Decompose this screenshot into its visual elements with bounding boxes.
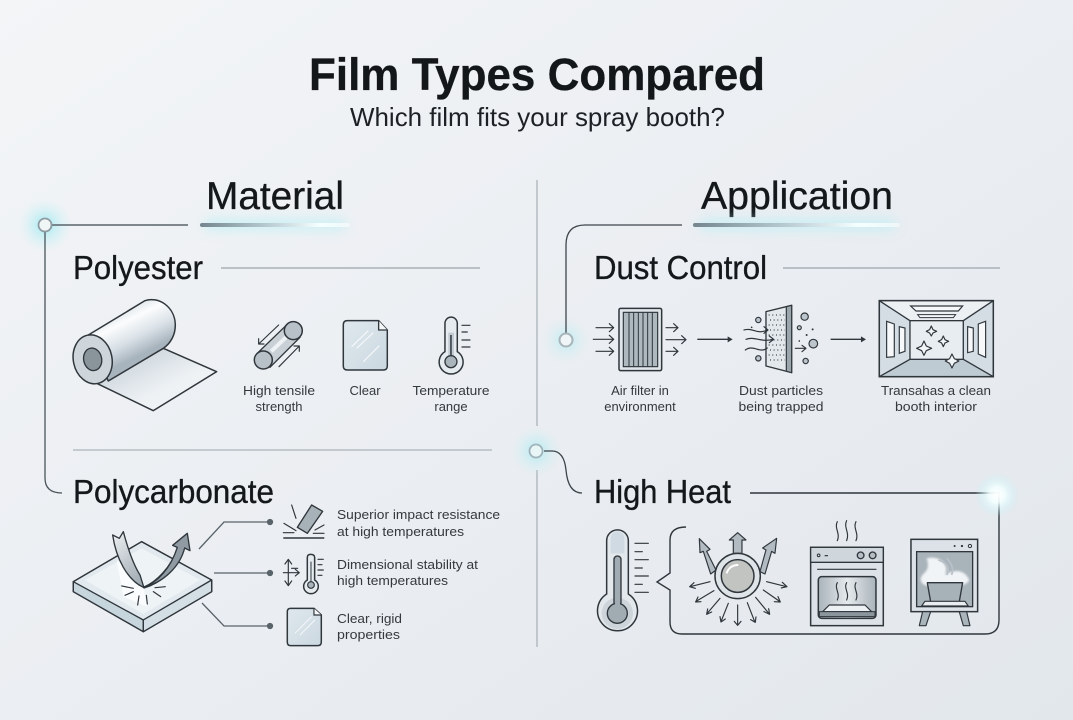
icon: temperature thermometer bbox=[439, 317, 470, 374]
label: air filter: environment bbox=[604, 399, 676, 414]
subtitle: Which film fits your spray booth? bbox=[350, 102, 725, 132]
label: temperature range: Temperature bbox=[412, 383, 490, 398]
text: superior impact resistance: Superior impact resistance bbox=[337, 507, 500, 522]
heading: Application: Application bbox=[701, 175, 893, 218]
text: dimensional stability bbox=[337, 557, 478, 588]
icon: clear sheet bbox=[343, 321, 387, 370]
icon: oven with steam bbox=[811, 521, 883, 626]
label: air filter: Air filter in bbox=[611, 383, 669, 398]
heading: High Heat: High Heat bbox=[594, 473, 731, 510]
bracket connector with glow bbox=[657, 473, 1019, 634]
icon: curing chamber bbox=[911, 539, 978, 626]
heading: Material: Material bbox=[206, 175, 344, 218]
label: high tensile strength bbox=[243, 383, 315, 414]
text: superior impact resistance bbox=[337, 507, 500, 539]
icon: polycarbonate slab with impact bbox=[73, 532, 212, 632]
label: dust particles: being trapped bbox=[738, 399, 824, 414]
text: clear rigid properties bbox=[337, 611, 402, 642]
text: clear rigid properties: properties bbox=[337, 627, 401, 642]
label: temperature range bbox=[412, 383, 490, 414]
icon: impact bar bbox=[283, 505, 324, 538]
arrow: trapping to clean booth bbox=[831, 336, 866, 342]
label: dust particles bbox=[738, 383, 824, 414]
label: clean booth: Transahas a clean bbox=[881, 383, 991, 398]
callout connectors bbox=[199, 520, 272, 628]
label: air filter bbox=[604, 383, 676, 414]
label: clear: Clear bbox=[349, 383, 381, 398]
icon: clean booth interior bbox=[879, 301, 993, 377]
text: clear rigid properties: Clear, rigid bbox=[337, 611, 402, 626]
text: superior impact resistance: at high temperatures bbox=[337, 524, 465, 539]
icon: clear rigid sheet bbox=[287, 608, 321, 646]
text: dimensional stability: Dimensional stability at bbox=[337, 557, 478, 572]
text: dimensional stability: high temperatures bbox=[337, 573, 449, 588]
arrow: filter to trapping bbox=[697, 336, 733, 342]
connector: application to dust control bbox=[542, 225, 682, 364]
connector: material timeline bbox=[18, 198, 188, 493]
icon: dimensional stability bbox=[283, 554, 323, 594]
heading: Dust Control: Dust Control bbox=[594, 249, 767, 286]
icon: high tensile strength bbox=[254, 322, 302, 369]
label: high tensile strength: High tensile bbox=[243, 383, 315, 398]
title: Film Types Compared bbox=[309, 49, 765, 100]
icon: high heat thermometer bbox=[597, 530, 648, 631]
heading: Polycarbonate: Polycarbonate bbox=[73, 473, 274, 510]
icon: air filter bbox=[593, 308, 686, 371]
heading: Polyester: Polyester bbox=[73, 249, 203, 286]
center divider bbox=[536, 180, 538, 647]
icon: radiating heat source bbox=[690, 533, 787, 625]
icon: dust particles trapped bbox=[744, 305, 818, 373]
label: temperature range: range bbox=[434, 399, 468, 414]
label: clean booth bbox=[881, 383, 991, 414]
node: center connector to high heat bbox=[511, 426, 582, 493]
label: high tensile strength: strength bbox=[256, 399, 302, 414]
icon: film roll bbox=[69, 300, 217, 411]
label: dust particles: Dust particles bbox=[739, 383, 824, 398]
label: clean booth: booth interior bbox=[895, 399, 978, 414]
